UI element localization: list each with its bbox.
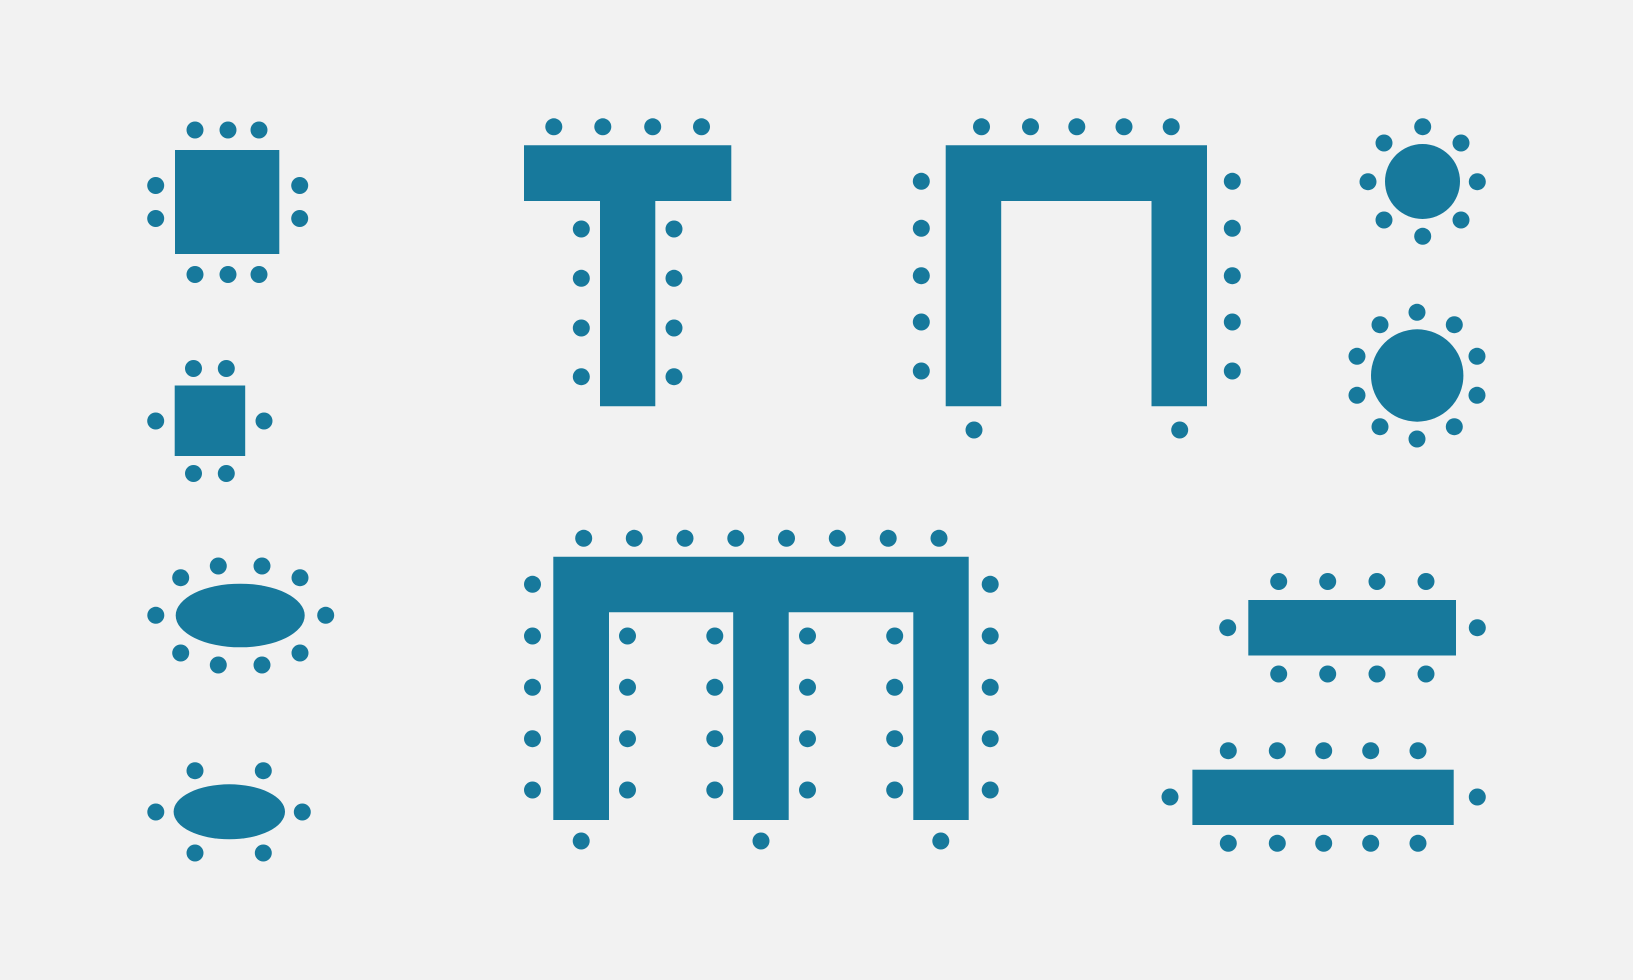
panel: large oval table with ten seats [147, 558, 334, 674]
large square table [175, 150, 279, 254]
seats around rectangular table [1219, 573, 1486, 682]
seats around small square table [147, 360, 272, 482]
seats around large oval table [147, 558, 334, 674]
panel: E-shaped table layout [524, 530, 999, 850]
panel: rectangular table with ten seats [1219, 573, 1486, 682]
E-shaped table with three legs [553, 557, 969, 820]
large oval table [176, 584, 305, 647]
panel: U-shaped table layout [913, 118, 1241, 439]
panel: long rectangular table with twelve seats [1162, 742, 1486, 852]
seats around large square table [147, 122, 308, 283]
small round table [1385, 144, 1460, 219]
seats around E-shaped table [524, 530, 999, 850]
panel: T-shaped table layout [524, 118, 731, 406]
panel: small square table with six seats [147, 360, 272, 482]
small square table [175, 386, 245, 456]
panel: large square table with ten seats [147, 122, 308, 283]
T-shaped table [524, 145, 731, 406]
seats around small oval table [147, 762, 311, 862]
seats around U-shaped table [913, 118, 1241, 439]
seats around small round table [1360, 118, 1486, 245]
panel: small oval table with six seats [147, 762, 311, 862]
panel: small round table with eight seats [1360, 118, 1486, 245]
long rectangular table [1192, 770, 1454, 825]
seats around large round table [1348, 304, 1486, 448]
seats around T-shaped table [545, 118, 710, 385]
seats around long rectangular table [1162, 742, 1486, 852]
panel: large round table with ten seats [1348, 304, 1486, 448]
rectangular table [1248, 600, 1456, 656]
large round table [1371, 329, 1463, 422]
small oval table [174, 784, 285, 839]
U-shaped table [946, 145, 1207, 406]
